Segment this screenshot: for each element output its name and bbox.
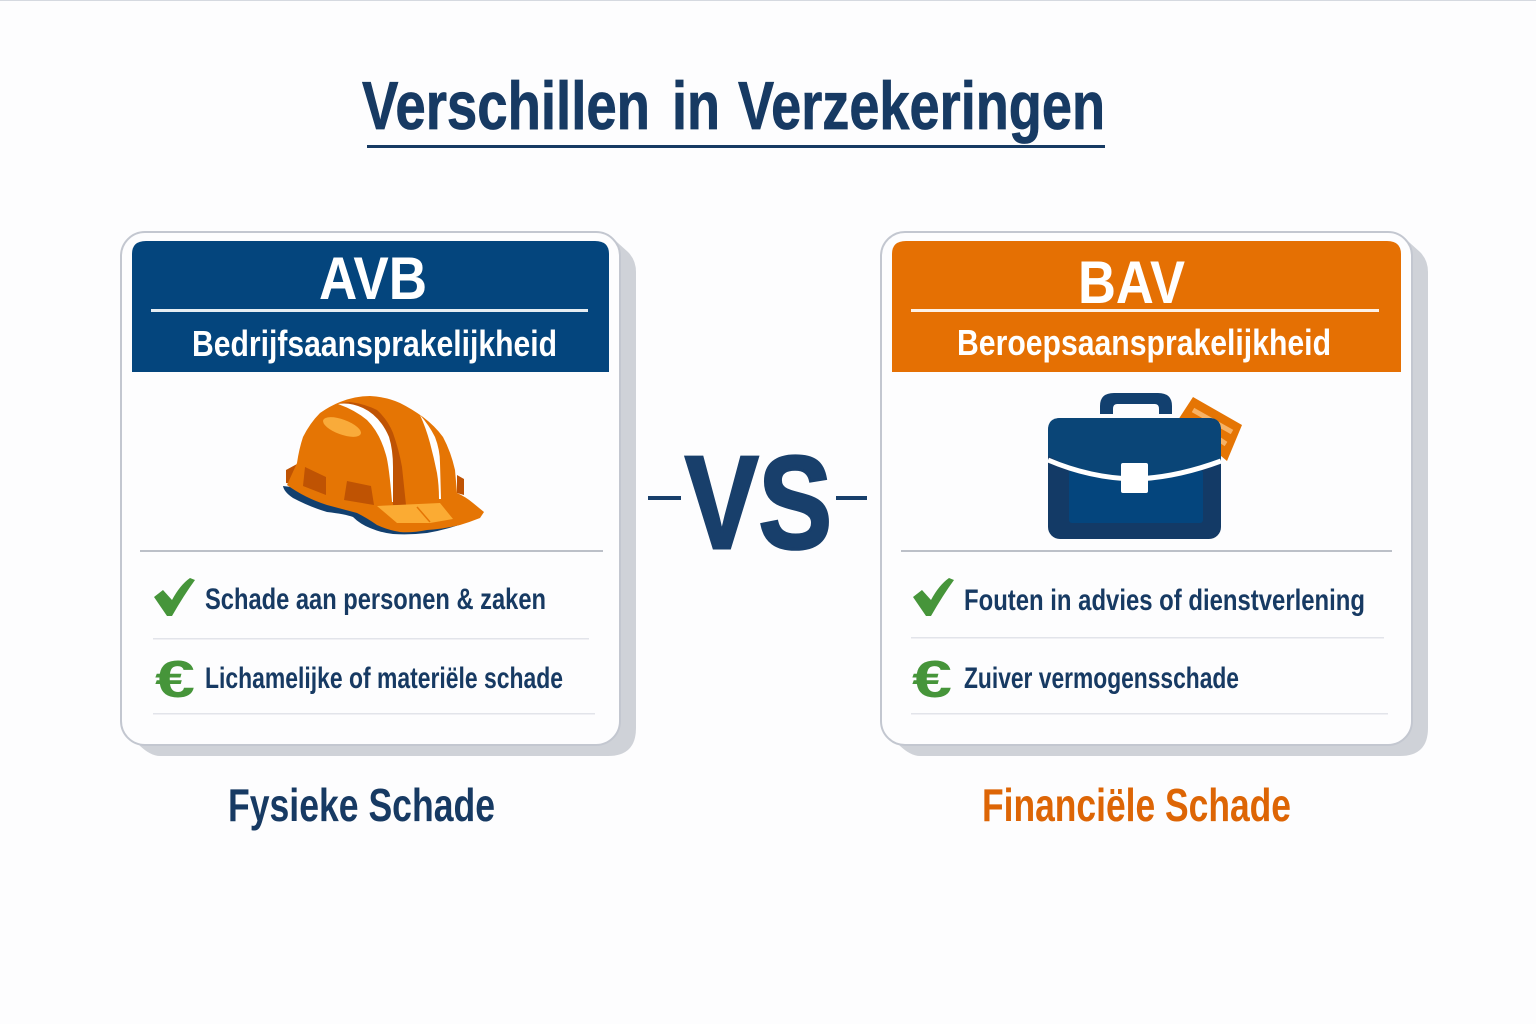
list item: lichamelijke schade: Lichamelijke of materiële schade xyxy=(205,662,563,695)
list item: fouten in advies: Fouten in advies of dienstverlening xyxy=(964,584,1365,617)
vents xyxy=(303,467,326,495)
icon: check xyxy=(154,578,195,616)
shell xyxy=(287,396,484,532)
VS label: VS xyxy=(685,429,832,576)
divider xyxy=(901,550,1392,552)
title: Verschillen xyxy=(362,68,650,144)
header: AVB: Bedrijfsaansprakelijkheid xyxy=(192,323,557,364)
title: in xyxy=(672,68,720,144)
header: BAV: BAV xyxy=(1078,249,1185,316)
title xyxy=(362,68,1105,148)
icon: hard hat xyxy=(283,396,484,534)
brim highlight xyxy=(377,503,453,523)
panel: BAV xyxy=(881,232,1428,756)
title: Verzekeringen xyxy=(738,68,1105,144)
caption: Fysieke Schade: Fysieke Schade xyxy=(228,779,495,831)
handle xyxy=(1100,393,1172,414)
caption: Financiële Schade: Financiële Schade xyxy=(982,779,1291,831)
icon: euro: € xyxy=(155,651,195,709)
header: AVB xyxy=(132,241,609,372)
divider xyxy=(140,550,603,552)
card shadow xyxy=(898,234,1428,756)
header: AVB: AVB xyxy=(319,245,427,312)
card shadow xyxy=(138,234,636,756)
card body xyxy=(121,232,620,745)
header: BAV: Beroepsaansprakelijkheid xyxy=(957,322,1331,363)
header: BAV xyxy=(892,241,1401,372)
icon: check xyxy=(913,578,954,616)
list item: fouten in advies xyxy=(913,578,1365,617)
list item: vermogensschade: Zuiver vermogensschade xyxy=(964,662,1239,695)
list item: vermogensschade xyxy=(912,651,1239,709)
card body xyxy=(881,232,1412,745)
icon: euro: € xyxy=(912,651,952,709)
hat underside xyxy=(283,486,470,534)
highlight xyxy=(321,413,363,441)
panel: AVB xyxy=(121,232,636,756)
side tabs xyxy=(286,464,297,484)
dark stripe xyxy=(340,402,406,505)
paper xyxy=(1178,397,1242,461)
list item: personen en zaken: Schade aan personen & zaken xyxy=(205,583,546,616)
list item: lichamelijke schade xyxy=(155,651,563,709)
list item: personen en zaken xyxy=(154,578,546,616)
icon: briefcase xyxy=(1048,393,1242,539)
case xyxy=(1048,418,1221,539)
white stripes xyxy=(338,404,393,502)
